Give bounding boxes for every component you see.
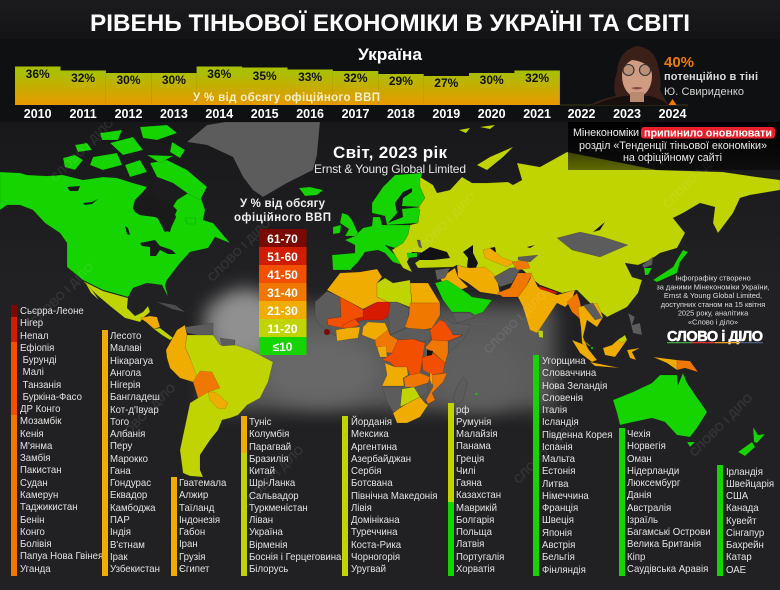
list column 9: up to 10 percent: Ірландія: [726, 466, 763, 478]
list column 6: 11-20 and up to 10 percent: Румунія: [456, 417, 491, 428]
Baltic Sea: [388, 188, 421, 223]
Moldova: [417, 240, 422, 248]
bar chart: Ukraine shadow economy: 30%: [162, 73, 186, 87]
bar chart: Ukraine shadow economy: 32%: [525, 71, 549, 85]
list column 7: up to 10 percent: Словаччина: [542, 368, 596, 379]
list column 2: 21-30 percent: В'єтнам: [110, 540, 145, 551]
Caribbean: [157, 302, 185, 312]
Hudson Bay and lakes: [67, 186, 177, 256]
list column 6: 11-20 and up to 10 percent: Гаяна: [456, 478, 482, 489]
quote: 40% potentially in shadow: Ю. Свириденко: [664, 86, 744, 98]
Africa: [315, 269, 478, 423]
list column 2: 21-30 percent: Перу: [110, 441, 132, 452]
list column 5: 11-20 percent: Чорногорія: [351, 552, 400, 563]
Europe: [332, 173, 425, 270]
callout: ministry stopped updating: Мінекономіки: [573, 127, 639, 139]
list column 7: up to 10 percent: Естонія: [542, 466, 575, 477]
list column 3: 21-30 percent: Іран: [179, 539, 198, 550]
list column 2: 21-30 percent: Того: [110, 417, 129, 428]
list column 6: 11-20 and up to 10 percent: Латвія: [456, 539, 484, 550]
list column 8: up to 10 percent: Нідерланди: [627, 466, 679, 477]
heading: World 2023: Ernst & Young Global Limited: [314, 162, 466, 176]
watermarks: СЛОВО І ДІЛО: [205, 216, 274, 285]
list column 1: highest shadow share: Нігер: [20, 318, 43, 329]
watermarks: СЛОВО І ДІЛО: [687, 391, 756, 460]
list column 7: up to 10 percent: Ісландія: [542, 417, 578, 428]
list column 7: up to 10 percent: Нова Зеландія: [542, 381, 607, 392]
list column 1: highest shadow share: Буркіна-Фасо: [23, 392, 82, 403]
logo: Слово і діло: СЛОВО і ДІЛО: [667, 329, 763, 345]
list column 2: 21-30 percent: Гондурас: [110, 478, 151, 489]
list column 5: 11-20 percent: Азербайджан: [351, 454, 411, 465]
list column 7: up to 10 percent: Литва: [542, 479, 568, 490]
list column 4: 21-30 and 11-20 percent: Сальвадор: [249, 491, 299, 502]
year axis: 2012: [115, 107, 142, 121]
quote: 40% potentially in shadow: 40%: [664, 54, 694, 71]
list column 9: up to 10 percent: Швейцарія: [726, 479, 774, 490]
list column 5: 11-20 percent: Лівія: [351, 503, 372, 514]
list column 3: 21-30 percent: Таїланд: [179, 503, 214, 514]
list column 4: 21-30 and 11-20 percent: Боснія і Герцеговина: [249, 552, 341, 563]
bar chart: Ukraine shadow economy: 30%: [116, 73, 141, 87]
year axis: 2013: [160, 107, 188, 121]
legend: 51-60: [267, 250, 298, 264]
list column 6: 11-20 and up to 10 percent: Греція: [456, 454, 484, 465]
legend: 41-50: [267, 268, 298, 282]
year axis: 2020: [478, 107, 506, 121]
list column 7: up to 10 percent: Німеччина: [542, 491, 588, 502]
list column 7: up to 10 percent: Японія: [542, 528, 572, 539]
Baja California: [85, 282, 99, 300]
list column 9: up to 10 percent: США: [726, 491, 748, 502]
list column 7: up to 10 percent: Швеція: [542, 515, 573, 526]
list column 4: 21-30 and 11-20 percent: Колумбія: [249, 429, 289, 440]
list column 2: 21-30 percent: Індія: [110, 527, 131, 538]
list column 1: highest shadow share: Болівія: [20, 539, 52, 550]
bar chart: Ukraine shadow economy: 35%: [253, 69, 277, 83]
list column 4: 21-30 and 11-20 percent: Бразилія: [249, 454, 289, 465]
list column 2: 21-30 percent: Бангладеш: [110, 392, 160, 403]
list column 8: up to 10 percent: [619, 428, 711, 576]
list column 1: highest shadow share: Судан: [20, 478, 48, 489]
list column 2: 21-30 percent: Нігерія: [110, 380, 140, 391]
year axis: 2022: [568, 107, 595, 121]
year axis: [24, 107, 686, 121]
year axis: 2018: [387, 107, 415, 121]
legend: 61-70: [267, 232, 298, 246]
callout: ministry stopped updating: розділ «Тенденції тіньової економіки»: [579, 140, 767, 152]
heading: World 2023: Світ, 2023 рік: [333, 143, 447, 162]
list column 1: highest shadow share: Пакистан: [20, 465, 62, 476]
list column 1: highest shadow share: [11, 305, 103, 576]
year axis: 2011: [70, 107, 97, 121]
list column 2: 21-30 percent: Марокко: [110, 454, 148, 465]
list column 7: up to 10 percent: Угорщина: [542, 356, 585, 367]
list column 4: 21-30 and 11-20 percent: Вірменія: [249, 540, 288, 551]
legend: 31-40: [267, 286, 298, 300]
list column 7: up to 10 percent: Мальта: [542, 454, 574, 465]
bar chart: Ukraine shadow economy: 27%: [434, 76, 459, 90]
Eurasia: [392, 152, 780, 317]
list column 7: up to 10 percent: Франція: [542, 503, 578, 514]
list column 7: up to 10 percent: Італія: [542, 405, 567, 416]
list column 2: 21-30 percent: Лесото: [110, 331, 141, 342]
list column 7: up to 10 percent: Південна Корея: [542, 430, 612, 441]
list column 9: up to 10 percent: Сінгапур: [726, 528, 764, 539]
South America: [166, 323, 273, 477]
Australia and New Zealand: [613, 373, 765, 456]
list column 1: highest shadow share: Мозамбік: [20, 416, 61, 427]
list column 1: highest shadow share: Бенін: [20, 515, 44, 526]
year axis: 2017: [342, 107, 369, 121]
bar chart: Ukraine shadow economy: 29%: [389, 74, 413, 88]
list column 7: up to 10 percent: Австрія: [542, 540, 575, 551]
list column 3: 21-30 percent: [171, 477, 226, 576]
bar chart: Ukraine shadow economy: [15, 66, 688, 105]
watermarks: СЛОВО І ДІЛО: [238, 443, 307, 512]
list column 6: 11-20 and up to 10 percent: [448, 403, 504, 576]
bar chart: Ukraine shadow economy: 33%: [298, 70, 322, 84]
list column 9: up to 10 percent: [717, 465, 774, 576]
bar chart: Ukraine shadow economy: 36%: [207, 67, 232, 81]
list column 5: 11-20 percent: Коста-Рика: [351, 540, 401, 551]
list column 9: up to 10 percent: Канада: [726, 503, 759, 514]
list column 4: 21-30 and 11-20 percent: Білорусь: [249, 564, 288, 575]
list column 1: highest shadow share: Танзанія: [23, 380, 61, 391]
Costa Rica and Panama: [154, 328, 173, 340]
heading: World 2023: [314, 143, 466, 176]
year axis: 2014: [205, 107, 233, 121]
list column 1: highest shadow share: Непал: [20, 331, 48, 342]
list column 2: 21-30 percent: Кот-д'Івуар: [110, 405, 159, 416]
bar chart: Ukraine shadow economy: 36%: [26, 67, 50, 81]
callout: ministry stopped updating: [568, 122, 780, 170]
list column 4: 21-30 and 11-20 percent: Туніс: [249, 417, 271, 428]
heading: Ukraine: Україна: [358, 46, 423, 64]
list column 4: 21-30 and 11-20 percent: [241, 416, 342, 576]
portrait: Svyrydenko: [592, 46, 668, 105]
list column 5: 11-20 percent: Туреччина: [351, 527, 397, 538]
quote: 40% potentially in shadow: [664, 54, 758, 105]
bar chart: Ukraine shadow economy: 32%: [71, 71, 95, 85]
list column 5: 11-20 percent: Сербія: [351, 466, 381, 477]
credits note: [656, 274, 770, 326]
year axis: 2015: [251, 107, 279, 121]
list column 5: 11-20 percent: [342, 416, 437, 576]
watermarks: СЛОВО І ДІЛО: [48, 116, 117, 185]
list column 8: up to 10 percent: Ізраїль: [627, 515, 658, 526]
list column 1: highest shadow share: Уганда: [20, 564, 51, 575]
list column 2: 21-30 percent: Узбекистан: [110, 564, 160, 575]
list column 2: 21-30 percent: Ірак: [110, 552, 128, 563]
list column 2: 21-30 percent: Малаві: [110, 343, 142, 354]
callout: ministry stopped updating: на офіційному сайті: [623, 152, 722, 164]
list column 4: 21-30 and 11-20 percent: Туркменістан: [249, 503, 308, 514]
list column 1: highest shadow share: Конго: [20, 527, 45, 538]
list column 6: 11-20 and up to 10 percent: Казахстан: [456, 490, 501, 501]
list column 6: 11-20 and up to 10 percent: Чилі: [456, 466, 476, 477]
bar chart: Ukraine shadow economy: 30%: [480, 73, 504, 87]
list column 3: 21-30 percent: Індонезія: [179, 515, 220, 526]
watermarks: СЛОВО І ДІЛО: [110, 381, 179, 450]
list column 2: 21-30 percent: [102, 330, 160, 576]
list column 1: highest shadow share: Бурунді: [23, 355, 57, 366]
list column 1: highest shadow share: М'янма: [20, 441, 52, 452]
Middle East and Asia: [435, 248, 698, 372]
list column 5: 11-20 percent: Домінікана: [351, 515, 400, 526]
legend: 11-20: [267, 322, 298, 336]
list column 3: 21-30 percent: Алжир: [179, 490, 208, 501]
list column 2: 21-30 percent: Гана: [110, 466, 131, 477]
list column 7: up to 10 percent: [533, 355, 612, 576]
list column 6: 11-20 and up to 10 percent: Португалія: [456, 552, 504, 563]
list column 5: 11-20 percent: Уругвай: [351, 564, 386, 575]
list column 6: 11-20 and up to 10 percent: Панама: [456, 441, 491, 452]
list column 5: 11-20 percent: Мексика: [351, 429, 389, 440]
list column 7: up to 10 percent: Словенія: [542, 393, 583, 404]
list column 6: 11-20 and up to 10 percent: Польща: [456, 527, 492, 538]
list column 8: up to 10 percent: Саудівська Аравія: [627, 564, 708, 575]
list column 2: 21-30 percent: Ангола: [110, 368, 141, 379]
list column 5: 11-20 percent: Ботсвана: [351, 478, 393, 489]
North America: [0, 125, 230, 297]
credits note: Інфографіку створено: [675, 274, 751, 282]
list column 1: highest shadow share: Ефіопія: [20, 343, 54, 354]
Greenland: [187, 122, 320, 197]
list column 1: highest shadow share: Камерун: [20, 490, 58, 501]
list column 6: 11-20 and up to 10 percent: Малайзія: [456, 429, 498, 440]
list column 6: 11-20 and up to 10 percent: Маврикій: [456, 503, 497, 514]
list column 2: 21-30 percent: Еквадор: [110, 490, 147, 501]
legend: 21-30: [267, 304, 298, 318]
list column 3: 21-30 percent: Гватемала: [179, 478, 226, 489]
list column 3: 21-30 percent: Грузія: [179, 552, 205, 563]
list column 8: up to 10 percent: Данія: [627, 490, 652, 501]
list column 4: 21-30 and 11-20 percent: Шрі-Ланка: [249, 478, 295, 489]
legend: ≤10: [273, 340, 293, 354]
list column 2: 21-30 percent: ПАР: [110, 515, 130, 526]
quote: 40% potentially in shadow: потенційно в тіні: [664, 71, 758, 83]
list column 8: up to 10 percent: Оман: [627, 454, 652, 465]
watermarks: СЛОВО І ДІЛО: [481, 288, 550, 357]
credits note: за даними Мінекономіки України,: [656, 282, 770, 292]
year axis: 2023: [613, 107, 641, 121]
bar chart: Ukraine shadow economy: 32%: [343, 71, 368, 85]
top dark band: [0, 0, 780, 122]
year axis: 2019: [432, 107, 460, 121]
list column 9: up to 10 percent: Бахрейн: [726, 540, 764, 551]
list column 6: 11-20 and up to 10 percent: Болгарія: [456, 515, 494, 526]
list column 7: up to 10 percent: Фінляндія: [542, 565, 585, 576]
title: РІВЕНЬ ТІНЬОВОЇ ЕКОНОМІКИ В УКРАЇНІ ТА СВІТІ: [90, 10, 690, 37]
list column 8: up to 10 percent: Багамські Острови: [627, 527, 711, 538]
list column 5: 11-20 percent: Північна Македонія: [351, 491, 437, 502]
list column 5: 11-20 percent: Йорданія: [351, 417, 392, 428]
year axis: 2021: [523, 107, 551, 121]
list column 4: 21-30 and 11-20 percent: Ліван: [249, 515, 273, 526]
callout: ministry stopped updating: припинило оновлювати: [644, 127, 772, 139]
list column 4: 21-30 and 11-20 percent: Китай: [249, 466, 275, 477]
watermarks: СЛОВО І ДІЛО: [660, 143, 729, 212]
Mongolia: [557, 232, 628, 257]
Central America: [140, 316, 160, 329]
Iceland: [299, 187, 323, 196]
watermarks: СЛОВО І ДІЛО: [28, 260, 97, 329]
year axis: 2010: [24, 107, 52, 121]
list column 1: highest shadow share: Замбія: [20, 453, 50, 464]
world map: [0, 122, 780, 477]
list column 3: 21-30 percent: Габон: [179, 527, 205, 538]
list column 1: highest shadow share: ДР Конго: [20, 404, 60, 415]
list column 1: highest shadow share: Сьєрра-Леоне: [20, 306, 84, 317]
list column 6: 11-20 and up to 10 percent: рф: [456, 404, 469, 416]
legend: У % від обсягу: [240, 198, 326, 210]
list column 8: up to 10 percent: Австралія: [627, 503, 671, 514]
background smoke photo: [0, 120, 780, 590]
Bulgaria: [407, 253, 417, 258]
list column 4: 21-30 and 11-20 percent: Україна: [249, 527, 283, 538]
watermarks: СЛОВО І ДІЛО: [511, 418, 580, 487]
list column 8: up to 10 percent: Велика Британія: [627, 539, 701, 550]
list column 4: 21-30 and 11-20 percent: Парагвай: [249, 442, 291, 453]
list column 6: 11-20 and up to 10 percent: Хорватія: [456, 564, 495, 575]
list column 9: up to 10 percent: ОАЕ: [726, 565, 746, 576]
credits note: Ernst & Young Global Limited,: [664, 291, 762, 300]
watermarks: СЛОВО І ДІЛО: [410, 190, 479, 259]
watermarks: [28, 116, 756, 512]
credits note: доступних станом на 15 квітня: [661, 300, 765, 309]
bar chart: Ukraine shadow economy: У % від обсягу офіційного ВВП: [193, 92, 380, 104]
list column 7: up to 10 percent: Бельгія: [542, 552, 574, 563]
list column 1: highest shadow share: Папуа Нова Гвінея: [20, 551, 103, 562]
list column 2: 21-30 percent: Нікарагуа: [110, 356, 153, 367]
Mexico: [83, 281, 150, 322]
credits note: 2025 року, аналітика: [678, 308, 749, 318]
list column 1: highest shadow share: Кенія: [20, 429, 44, 440]
list column 7: up to 10 percent: Іспанія: [542, 442, 572, 453]
legend: офіційного ВВП: [234, 212, 331, 224]
list column 3: 21-30 percent: Єгипет: [179, 564, 209, 575]
list column 2: 21-30 percent: Албанія: [110, 429, 145, 440]
list column 2: 21-30 percent: Камбоджа: [110, 503, 155, 514]
list column 8: up to 10 percent: Кіпр: [627, 552, 645, 563]
year axis: 2024: [659, 107, 686, 121]
list column 9: up to 10 percent: Катар: [726, 552, 752, 563]
list column 8: up to 10 percent: Люксембург: [627, 478, 680, 489]
list column 1: highest shadow share: Таджикистан: [20, 502, 78, 513]
list column 1: highest shadow share: Малі: [23, 367, 44, 378]
credits note: «Слово і діло»: [688, 318, 738, 326]
list column 5: 11-20 percent: Аргентина: [351, 442, 397, 453]
list column 9: up to 10 percent: Кувейт: [726, 516, 757, 527]
legend: [234, 198, 331, 355]
list column 8: up to 10 percent: Чехія: [627, 429, 651, 440]
list column 8: up to 10 percent: Норвегія: [627, 441, 666, 452]
year axis: 2016: [296, 107, 324, 121]
inland seas: [418, 222, 605, 270]
Arctic islands: [459, 125, 705, 222]
